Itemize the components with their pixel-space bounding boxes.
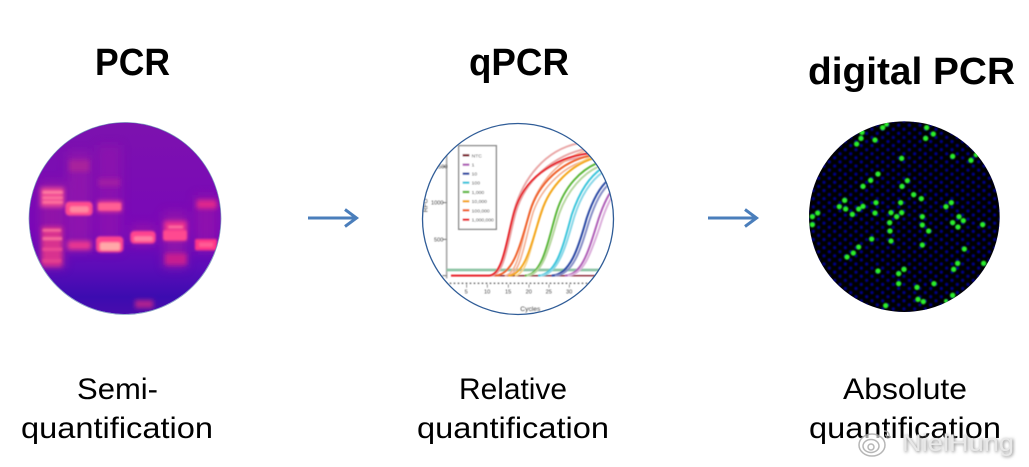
axis labels: 1000 [431,201,444,207]
caption: relative quantification: quantification [417,412,609,445]
caption: absolute quantification: Absolute [843,373,967,406]
title: PCR: PCR [95,42,170,84]
legend box: 100,000 [472,208,490,214]
caption: relative quantification [417,373,609,445]
watermark: NielHung [902,430,1014,457]
axis labels: 10 [484,290,490,296]
axis labels: 25 [546,290,552,296]
axis labels: Cycles [520,306,541,313]
caption: absolute quantification: quantification [809,412,1001,445]
qPCR amplification chart [422,123,617,315]
axis labels: 5 [465,290,468,296]
arrow: PCR to qPCR [308,210,356,226]
watermark [859,430,1015,458]
legend box: 10 [472,172,477,178]
caption: semi-quantification: Semi- [77,373,158,406]
legend box [459,146,496,229]
caption: relative quantification: Relative [459,373,567,406]
axis labels: 20 [526,290,532,296]
legend box: 100 [472,181,480,187]
axis labels: 15 [505,290,511,296]
legend box: 1,000,000 [472,218,494,224]
title: qPCR: qPCR [469,42,569,84]
amplification curves [451,143,615,276]
watermark: NielHung [903,431,1015,458]
caption: semi-quantification [21,373,213,445]
caption: absolute quantification [809,373,1001,445]
axis labels: 1500 [435,165,448,171]
legend box: NTC [472,153,482,159]
axis labels: 500 [434,237,443,243]
gel electrophoresis image [27,120,223,317]
arrow: qPCR to digital PCR [708,210,756,226]
axis labels [423,165,572,313]
legend box: 1 [472,162,475,168]
axis labels: 30 [566,290,572,296]
gel circle outline [29,122,221,314]
digital PCR droplet image [807,120,1003,313]
title: digital PCR: digital PCR [808,51,1015,93]
axes and threshold [442,155,599,288]
legend box: 10,000 [472,199,487,205]
caption: semi-quantification: quantification [21,412,213,445]
axis labels: RFU [423,198,430,212]
legend box: 1,000 [472,190,484,196]
